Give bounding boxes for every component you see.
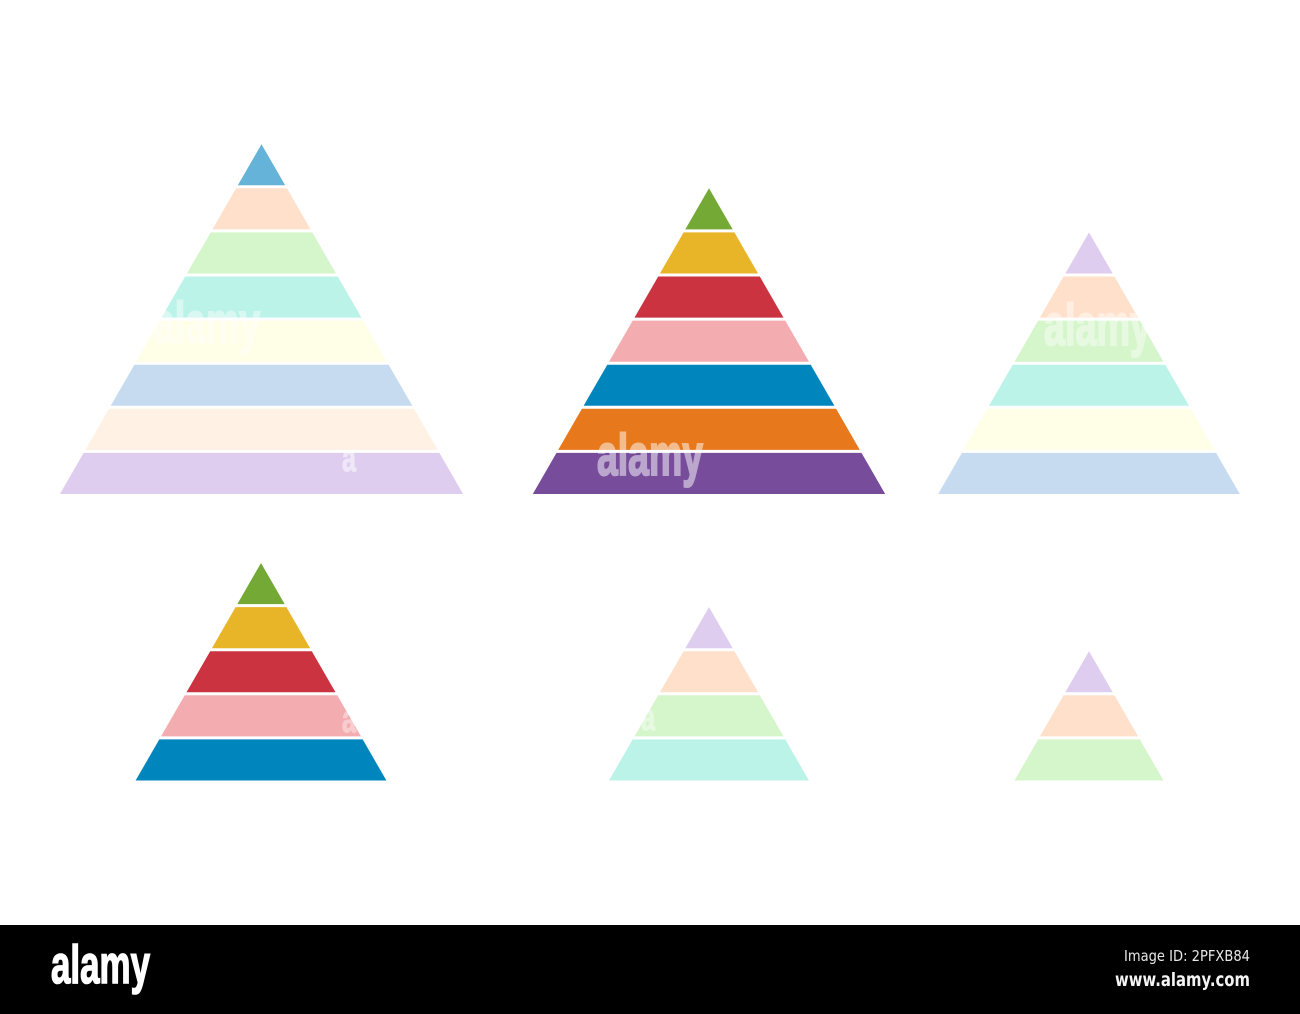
- footer bar: [0, 925, 1300, 1014]
- footer logo: alamy: [51, 935, 150, 995]
- pyramid: 5 saturated layers: [136, 563, 386, 780]
- watermarks: a: [342, 699, 357, 741]
- pyramid: 4 pastel layers: [609, 607, 809, 780]
- watermarks: alamy: [154, 291, 260, 356]
- pyramid: 6 pastel layers: [938, 232, 1240, 494]
- watermarks: alamy: [597, 423, 703, 488]
- pyramid: 7 saturated layers: [533, 188, 885, 494]
- website: www.alamy.com: [1115, 969, 1250, 991]
- pyramid: 8 pastel layers: [60, 144, 463, 494]
- pyramid: 3 pastel layers: [1014, 651, 1164, 780]
- watermarks: a: [342, 438, 357, 480]
- watermarks: alamy: [1044, 293, 1151, 358]
- watermarks: a: [641, 697, 656, 739]
- watermarks: [154, 291, 1151, 741]
- image id: Image ID: 2PFXB84: [1124, 947, 1250, 965]
